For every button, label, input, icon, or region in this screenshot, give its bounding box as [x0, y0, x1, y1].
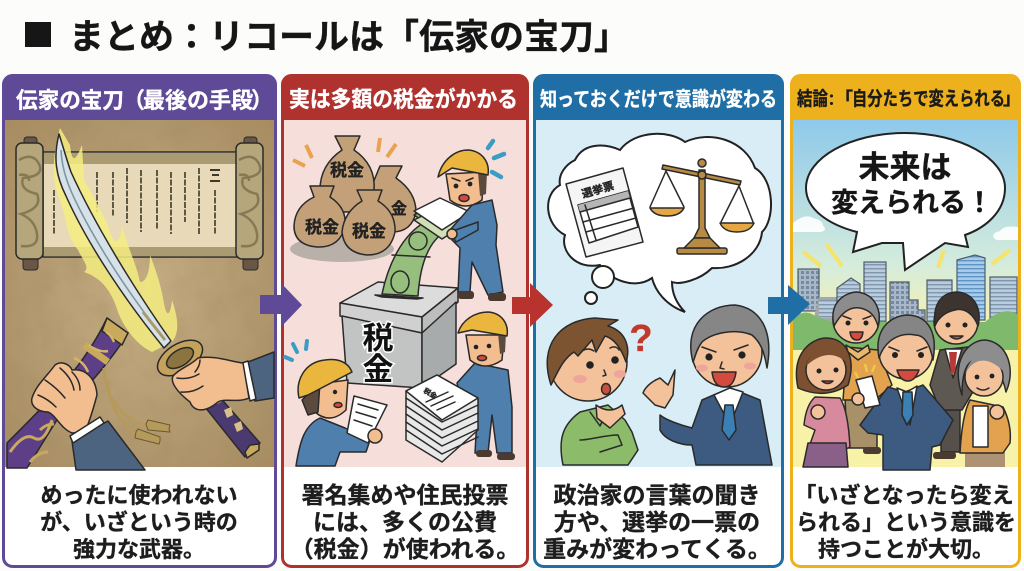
icon: money bags: 税金 [352, 221, 386, 241]
stack of papers [406, 375, 478, 462]
icon: ballot [566, 168, 643, 257]
heading: 伝家の宝刀: ） [251, 88, 273, 113]
icon: scabbard and left hand [7, 318, 170, 470]
heading: 結論: 結論 [797, 88, 828, 110]
red question mark: ? [629, 318, 653, 360]
icon: ballot box labelled tax: 税 [362, 321, 394, 356]
icon: money bags [290, 136, 416, 262]
heading: 結論: ： [824, 92, 839, 109]
caption: 署名集めや住民投票 [302, 482, 508, 508]
icon: katana hilt and right hand [151, 333, 274, 458]
clouds and rays [793, 216, 1018, 268]
caption: 重みが変わってくる。 [543, 536, 771, 562]
speech bubble [806, 133, 1005, 270]
heading: 結論: 「 [835, 89, 853, 109]
heading: 結論: 」 [1003, 89, 1021, 109]
icon: balance scale [650, 159, 754, 254]
caption: 持つことが大切。 [818, 537, 994, 562]
caption: （税金）が使われる。 [291, 536, 519, 562]
title: まとめ：リコールは「伝家の宝刀」 [69, 18, 629, 57]
caption: めったに使われない [41, 483, 237, 508]
person: central man with ballot [852, 315, 953, 470]
worker pouring money [438, 141, 506, 301]
icon: money bags: 税金 [330, 160, 364, 180]
heading: 伝家の宝刀: （ [123, 88, 145, 113]
person: politician [643, 305, 772, 465]
panel: 意識 [534, 75, 783, 566]
heading: 税金: 実は多額の税金がかかる [289, 87, 518, 112]
person: thinking citizen [547, 318, 638, 465]
arrow: blue [768, 285, 810, 325]
speech bubble: 変えられる！ [831, 188, 993, 218]
person: woman in cardigan [958, 340, 1010, 467]
icon: money bags: 税金 [305, 217, 339, 237]
icon: ballot box labelled tax [340, 282, 458, 388]
worker reading document [285, 341, 387, 466]
caption: が、いざという時の [40, 510, 238, 535]
caption: 政治家の言葉の聞き [554, 482, 760, 508]
icon: katana blade [56, 134, 171, 348]
parchment background [5, 120, 274, 467]
icon: banknotes flowing [382, 198, 470, 296]
heading: 意識: 知っておくだけで意識が変わる [540, 87, 777, 111]
thought bubble [548, 134, 771, 312]
city skyline [798, 255, 1017, 325]
caption: 強力な武器。 [73, 537, 205, 562]
panel: 結論 [791, 75, 1021, 566]
speech bubble: 未来は [858, 150, 952, 185]
icon: ballot: 選挙票 [580, 178, 616, 201]
sword flames [54, 128, 177, 352]
arrow: red [512, 283, 553, 327]
stack of papers: 税金 [422, 386, 439, 401]
worker stacking paper [457, 312, 515, 460]
person: woman in pink [796, 338, 851, 467]
arrow: purple [260, 283, 302, 327]
heading: 伝家の宝刀 [16, 88, 273, 113]
caption: 「いざとなったら変え [794, 483, 1014, 508]
caption: 方や、選挙の一票の [554, 509, 760, 535]
greenery and ground [793, 311, 1018, 467]
icon: money bags: 金 [391, 199, 407, 218]
icon: scroll [16, 137, 263, 270]
heading: 伝家の宝刀: 伝家の宝刀 [16, 88, 124, 113]
icon: ballot box labelled tax: 金 [362, 352, 394, 387]
panel: 伝家の宝刀 [3, 75, 276, 566]
caption: られる」という意識を [796, 510, 1016, 535]
person: man in orange [833, 292, 892, 454]
caption: には、多くの公費 [313, 509, 497, 535]
person: man in dark suit [930, 292, 980, 459]
heading: 伝家の宝刀: 最後の手段 [143, 88, 253, 113]
panel: 税金 [282, 75, 528, 566]
